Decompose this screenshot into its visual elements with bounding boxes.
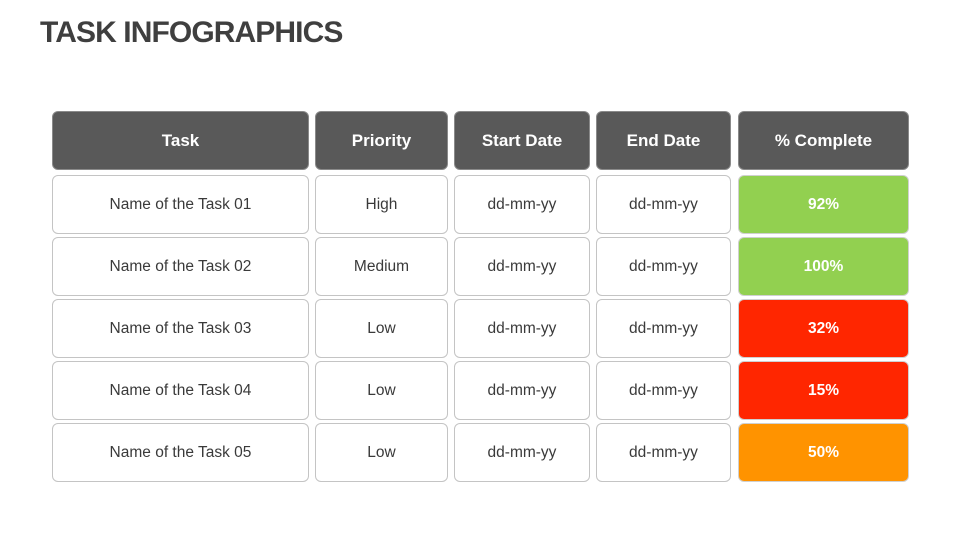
table: High	[366, 196, 397, 212]
table: Name of the Task 01	[110, 196, 251, 212]
table: Priority	[352, 130, 411, 150]
table: Low	[367, 382, 396, 398]
table: End Date	[627, 130, 700, 150]
table: dd-mm-yy	[629, 258, 698, 274]
table: dd-mm-yy	[629, 444, 698, 460]
title: TASK INFOGRAPHICS	[40, 16, 342, 49]
table: dd-mm-yy	[629, 320, 698, 336]
table: 100%	[804, 258, 843, 274]
table: dd-mm-yy	[488, 444, 556, 460]
row 3	[52, 299, 909, 358]
table: dd-mm-yy	[488, 258, 556, 274]
table: dd-mm-yy	[629, 382, 698, 398]
table: 50%	[808, 444, 839, 460]
table: dd-mm-yy	[488, 196, 556, 212]
row 1	[52, 175, 909, 234]
table: Task	[162, 130, 199, 150]
table: Name of the Task 03	[110, 320, 251, 336]
table: Start Date	[482, 130, 562, 150]
row 4	[52, 361, 909, 420]
table: 15%	[808, 382, 839, 398]
table: dd-mm-yy	[488, 320, 556, 336]
header row	[52, 111, 909, 170]
table: Medium	[354, 258, 409, 274]
row 5	[52, 423, 909, 482]
table: Low	[367, 444, 396, 460]
table: dd-mm-yy	[488, 382, 556, 398]
table: % Complete	[775, 130, 872, 150]
row 2	[52, 237, 909, 296]
table: dd-mm-yy	[629, 196, 698, 212]
table: 32%	[808, 320, 839, 336]
table: Name of the Task 02	[110, 258, 251, 274]
table: Name of the Task 04	[110, 382, 251, 398]
table: Low	[367, 320, 396, 336]
table: 92%	[808, 196, 839, 212]
table: Name of the Task 05	[110, 444, 251, 460]
